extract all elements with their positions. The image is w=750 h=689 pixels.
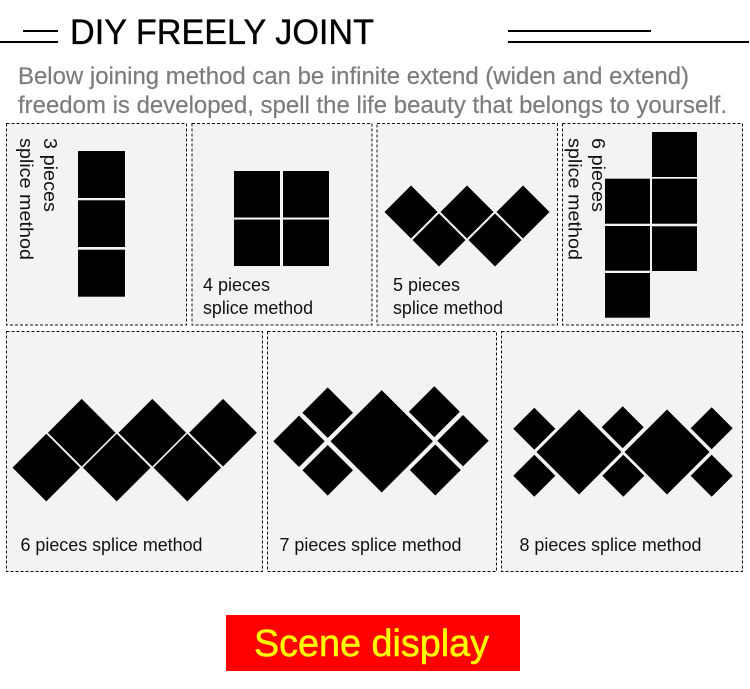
intro text — [18, 63, 727, 119]
label: 3 pieces splice method: 3 pieces — [40, 138, 60, 212]
tiles: 3 squares — [78, 151, 125, 297]
label: 6 pieces splice method: splice method — [564, 138, 584, 260]
label: 5 pieces splice method: 5 pieces — [393, 275, 460, 295]
scene display banner: Scene display — [254, 623, 489, 665]
label: 5 pieces splice method — [393, 275, 503, 318]
tiles: 6 squares — [605, 132, 697, 318]
tiles: 6 diamonds — [12, 399, 257, 501]
panel: 7 pieces — [268, 332, 496, 572]
panel: 5 pieces — [377, 124, 558, 325]
label: 3 pieces splice method — [16, 138, 60, 260]
panel: 8 pieces — [502, 332, 742, 572]
label: 7 pieces splice method — [280, 535, 462, 555]
panel: 3 pieces — [6, 124, 186, 325]
intro text: freedom is developed, spell the life beauty that belongs to yourself. — [18, 92, 727, 119]
label: 4 pieces splice method — [203, 275, 313, 318]
label: 3 pieces splice method: splice method — [16, 138, 36, 260]
intro text: Below joining method can be infinite extend (widen and extend) — [18, 63, 689, 90]
label: 4 pieces splice method: splice method — [203, 298, 313, 318]
left header lines — [0, 30, 58, 43]
title: DIY FREELY JOINT — [70, 13, 374, 52]
header — [0, 13, 749, 52]
right header lines — [508, 30, 749, 43]
scene display banner — [226, 615, 520, 671]
label: 6 pieces splice method — [20, 535, 202, 555]
panel: 6 pieces diamonds — [6, 332, 262, 572]
panel: 4 pieces — [192, 124, 372, 325]
tiles: 8 diamonds — [513, 406, 733, 497]
label: 4 pieces splice method: 4 pieces — [203, 275, 270, 295]
label: 6 pieces splice method: 6 pieces — [588, 138, 608, 212]
label: 8 pieces splice method — [520, 535, 702, 555]
panel: 6 pieces vertical — [562, 124, 742, 325]
label: 6 pieces splice method — [564, 138, 608, 260]
tiles: 7 diamonds — [273, 386, 489, 496]
label: 5 pieces splice method: splice method — [393, 298, 503, 318]
tiles: 5 diamonds — [384, 186, 550, 266]
tiles: 4 squares — [234, 171, 329, 266]
